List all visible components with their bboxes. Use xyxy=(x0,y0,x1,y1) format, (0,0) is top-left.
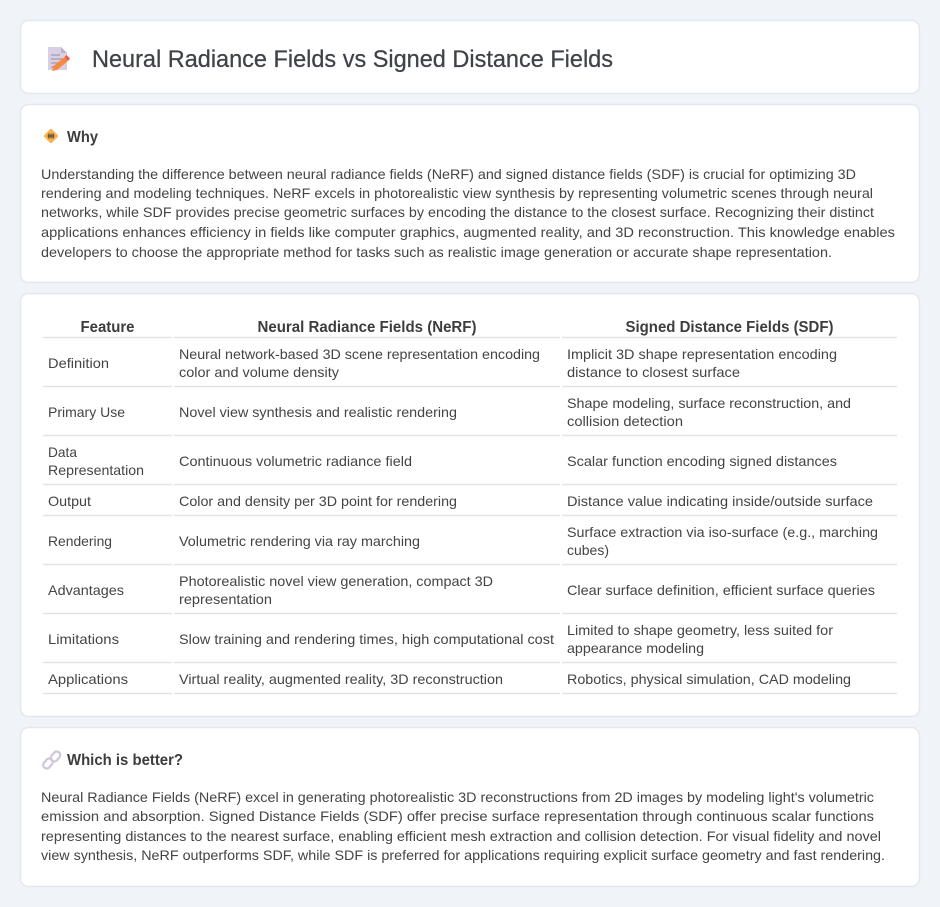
row: data representation: Data xyxy=(48,444,77,460)
row: limitations: Limited to shape geometry, less suited for xyxy=(567,622,833,638)
text block: why paragraph: applications enhances efficiency in fields like computer graphics, augmented reality, and 3D reconstruction. This knowledge enables xyxy=(41,224,895,240)
row: data representation xyxy=(48,444,837,478)
row: data representation: Continuous volumetric radiance field xyxy=(179,453,412,469)
row: output: Output xyxy=(48,493,91,509)
row: definition: color and volume density xyxy=(179,364,339,380)
row: limitations: appearance modeling xyxy=(567,640,704,656)
panel: title header xyxy=(20,20,920,94)
text block: which paragraph: representing distances to the nearest surface, enabling efficient mesh extraction and collision detection. For visual fidelity and novel xyxy=(41,828,881,844)
heading: which is better: Which is better? xyxy=(67,752,183,769)
table header xyxy=(80,319,834,336)
row: advantages: Photorealistic novel view generation, compact 3D xyxy=(179,573,493,589)
row: applications: Virtual reality, augmented reality, 3D reconstruction xyxy=(179,671,503,687)
table header: Signed Distance Fields (SDF) xyxy=(626,319,834,336)
table header: Feature xyxy=(80,319,135,336)
row: rendering: Surface extraction via iso-surface (e.g., marching xyxy=(567,524,878,540)
row: definition xyxy=(48,346,837,380)
row: advantages: Advantages xyxy=(48,582,124,598)
text block: why paragraph: developers to choose the appropriate method for tasks such as realistic image generation or accurate shape representation. xyxy=(41,244,832,260)
row: definition: distance to closest surface xyxy=(567,364,740,380)
text block: why paragraph: Understanding the difference between neural radiance fields (NeRF) and signed distance fields (SDF) is crucial for optimizing 3D xyxy=(41,166,856,182)
row: applications: Robotics, physical simulation, CAD modeling xyxy=(567,671,851,687)
panel: comparison table xyxy=(20,294,920,716)
text block: why paragraph: networks, while SDF provides precise geometric surfaces by encoding the distance to the closest surface. Recognizing their distinct xyxy=(41,204,874,220)
row: data representation: Scalar function encoding signed distances xyxy=(567,453,837,469)
row: rendering: cubes) xyxy=(567,542,609,558)
row: definition: Definition xyxy=(48,355,109,371)
row: limitations xyxy=(48,622,833,656)
row: data representation: Representation xyxy=(48,462,144,478)
text block: why paragraph xyxy=(41,166,895,260)
row: advantages: representation xyxy=(179,591,272,607)
title: Neural Radiance Fields vs Signed Distance Fields xyxy=(92,46,613,73)
row: primary use: Shape modeling, surface reconstruction, and xyxy=(567,395,851,411)
row: output: Color and density per 3D point for rendering xyxy=(179,493,457,509)
icon: diamond sign xyxy=(43,128,59,144)
row: limitations: Limitations xyxy=(48,631,119,647)
row: applications: Applications xyxy=(48,671,128,687)
panel: why xyxy=(20,104,920,282)
row: applications xyxy=(48,671,851,687)
row: limitations: Slow training and rendering times, high computational cost xyxy=(179,631,554,647)
row: advantages xyxy=(48,573,875,607)
row: rendering: Volumetric rendering via ray marching xyxy=(179,533,420,549)
panel: which is better xyxy=(20,728,920,886)
text block: which paragraph xyxy=(41,789,885,863)
text block: why paragraph: rendering and modeling techniques. NeRF excels in photorealistic view synthesis by representing volumetric scenes through neural xyxy=(41,185,873,201)
row: primary use: Novel view synthesis and realistic rendering xyxy=(179,404,457,420)
table header: Neural Radiance Fields (NeRF) xyxy=(258,319,476,336)
row: primary use: collision detection xyxy=(567,413,683,429)
row: primary use xyxy=(48,395,851,429)
row: advantages: Clear surface definition, efficient surface queries xyxy=(567,582,875,598)
icon: link xyxy=(42,750,62,770)
icon: document with pencil xyxy=(48,47,70,71)
heading: why: Why xyxy=(67,129,98,146)
row: rendering: Rendering xyxy=(48,533,112,549)
row: output xyxy=(48,493,873,509)
row: definition: Implicit 3D shape representation encoding xyxy=(567,346,837,362)
row: definition: Neural network-based 3D scene representation encoding xyxy=(179,346,540,362)
text block: which paragraph: emission and absorption. Signed Distance Fields (SDF) offer precise surface representation through continuous scalar functions xyxy=(41,808,874,824)
row: output: Distance value indicating inside/outside surface xyxy=(567,493,873,509)
text block: which paragraph: view synthesis, NeRF outperforms SDF, while SDF is preferred for applications requiring explicit surface geometry and fast rendering. xyxy=(41,847,885,863)
row: rendering xyxy=(48,524,878,558)
text block: which paragraph: Neural Radiance Fields (NeRF) excel in generating photorealistic 3D reconstructions from 2D images by modeling light's volumetric xyxy=(41,789,874,805)
row: primary use: Primary Use xyxy=(48,404,125,420)
